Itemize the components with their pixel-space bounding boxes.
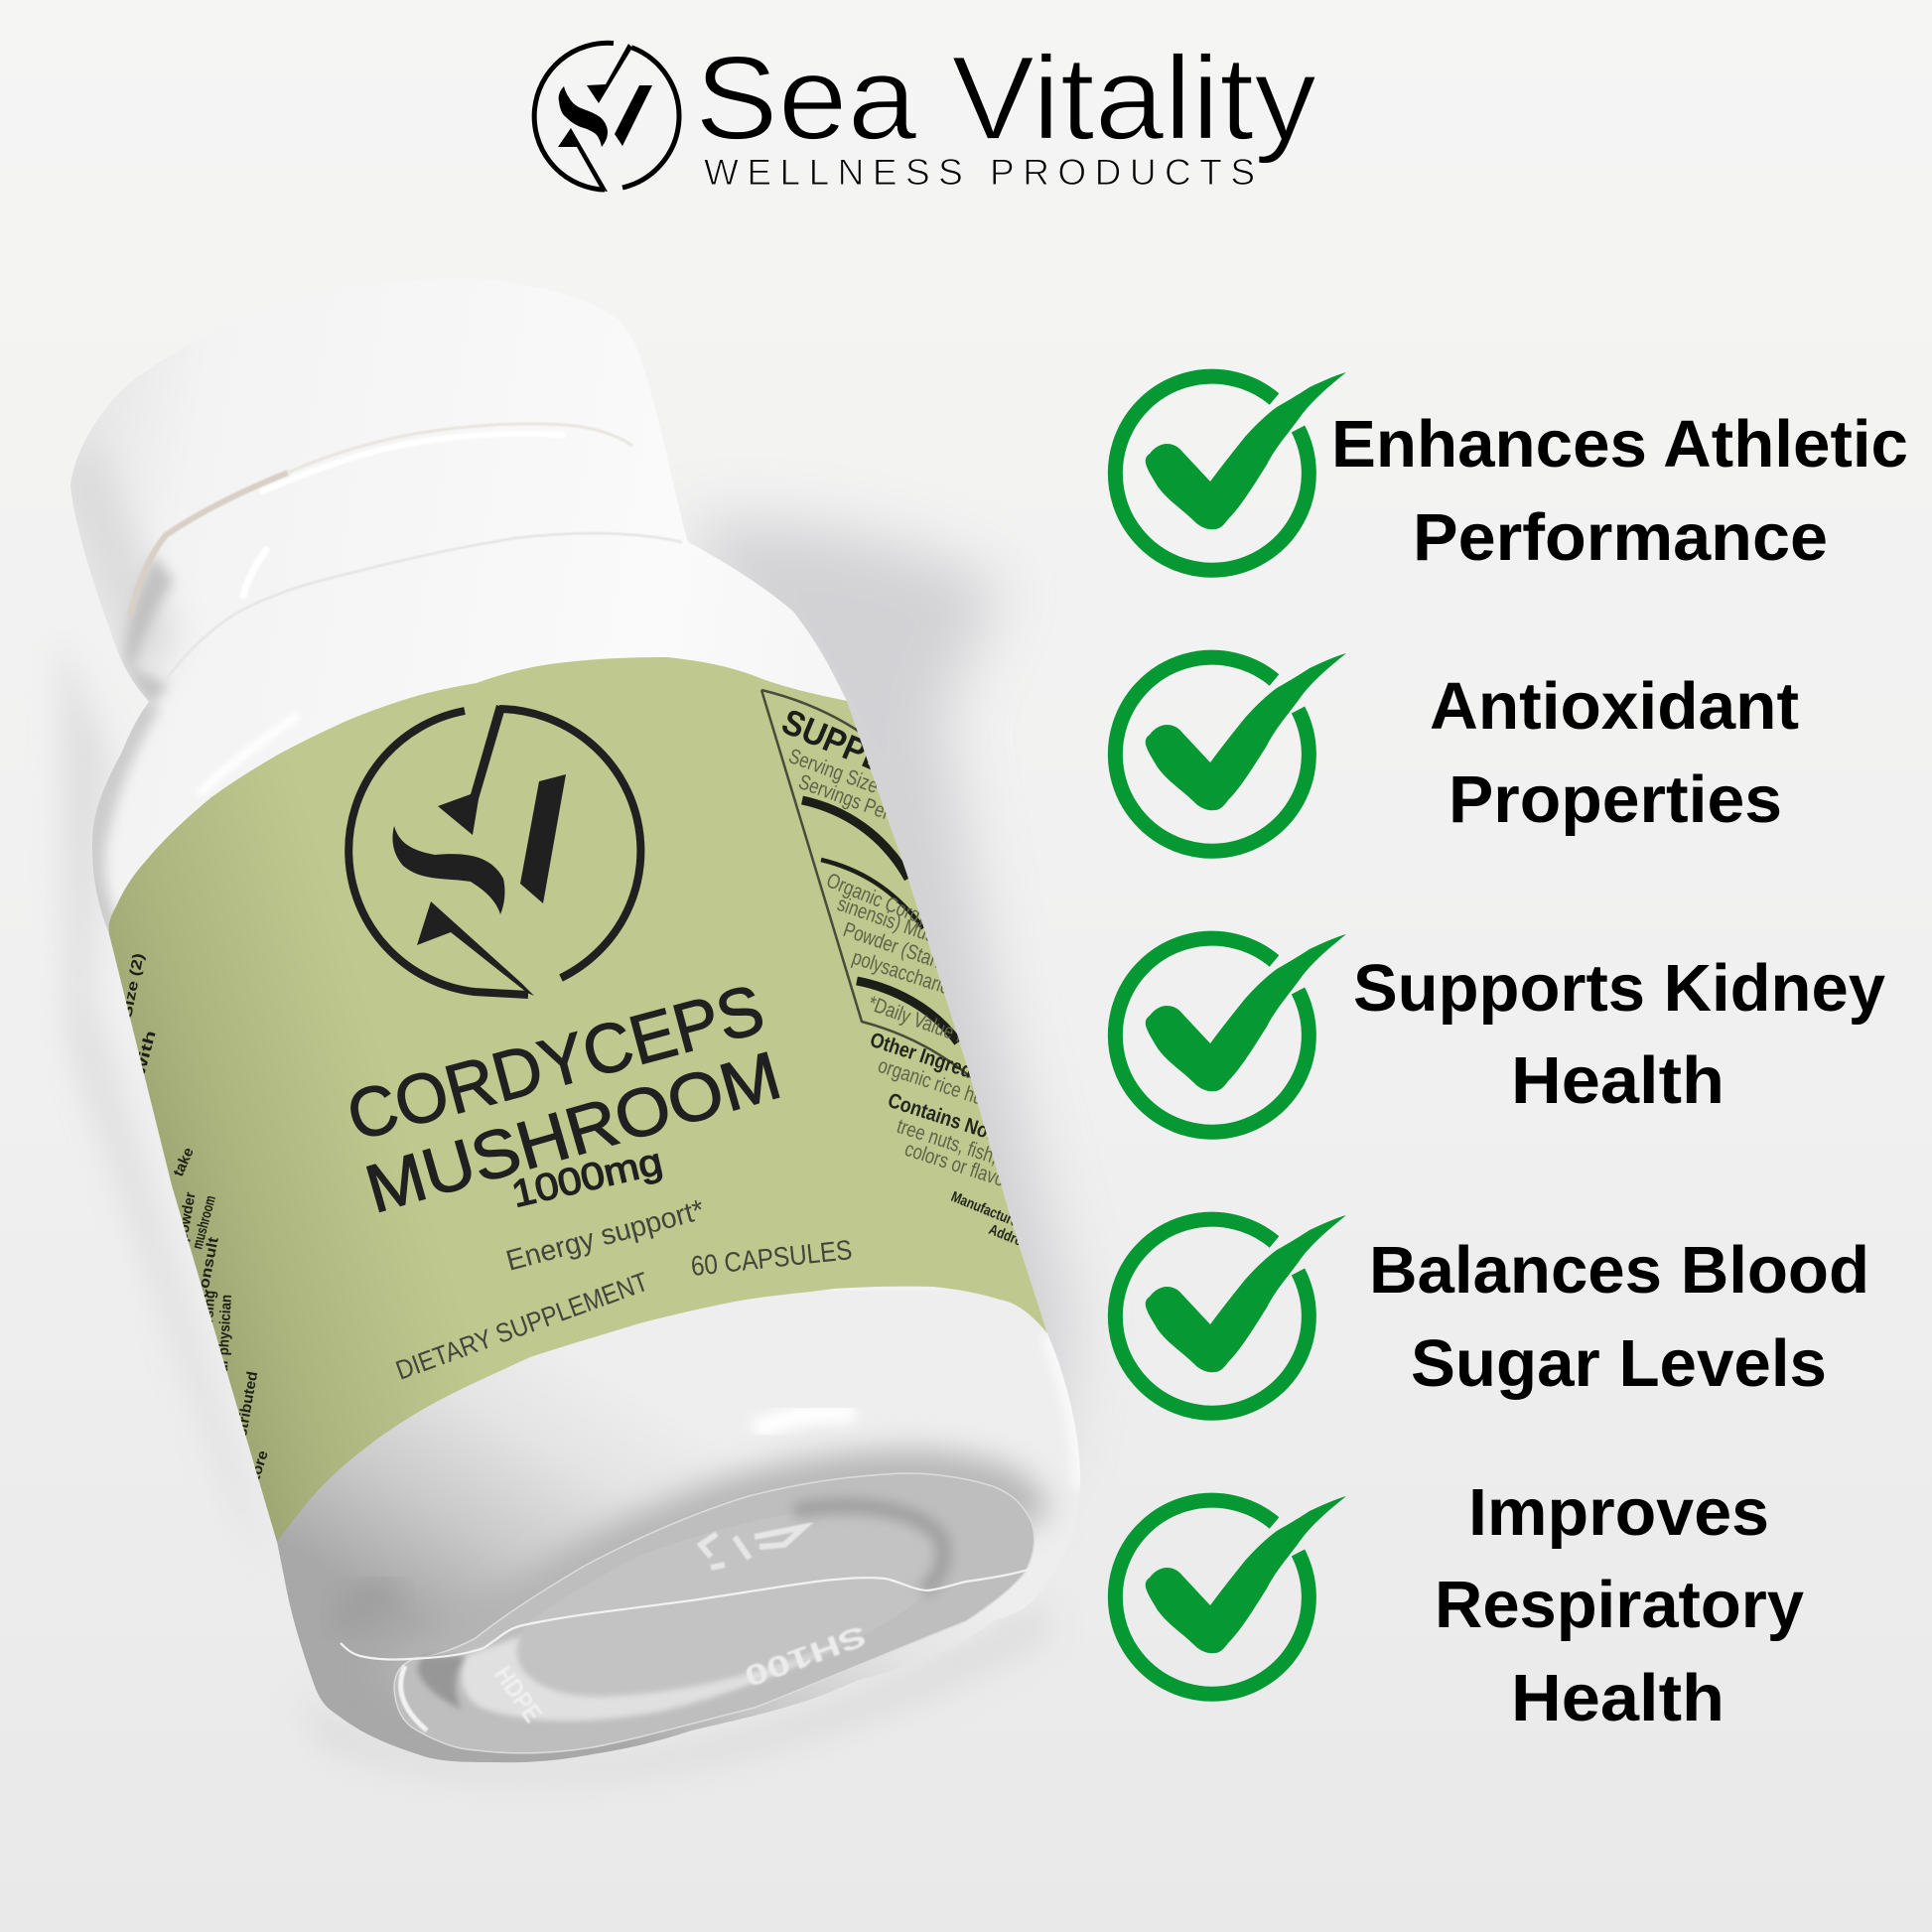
benefit text: [1435, 1475, 1804, 1735]
product name line 2: MUSHROOM: [357, 1037, 788, 1227]
benefit: blood sugar: [1115, 1215, 1869, 1413]
brand name: Sea Vitality: [695, 32, 1316, 165]
wrapped left side text: powder: [174, 1190, 200, 1243]
wrapped left side text: Size (2): [118, 952, 148, 1020]
benefit text: Properties: [1449, 762, 1782, 837]
supplement facts panel: colors or flavors: [901, 1138, 1021, 1196]
benefit: athletic performance: [1115, 372, 1908, 575]
benefit text: Respiratory: [1435, 1568, 1804, 1642]
wrapped left side text: Distributed: [230, 1370, 261, 1453]
supplement facts panel: Contains No:: [885, 1089, 997, 1145]
supplement facts panel: sinensis) Mushroom: [834, 893, 983, 963]
benefit text: [1331, 407, 1908, 575]
base bright lip: [462, 1636, 844, 1721]
icon: green check: [1115, 934, 1346, 1132]
bottle silhouette with cap: [70, 278, 1080, 1762]
supplement facts panel: Serving Size 2 Capsules: [785, 745, 964, 829]
benefit text: Improves: [1468, 1475, 1769, 1550]
benefit: antioxidant: [1115, 653, 1799, 851]
bottle shadow: [60, 522, 1072, 1783]
capsule count: 60 CAPSULES: [689, 1234, 854, 1282]
supplement facts panel: *Daily Value not: [865, 992, 984, 1054]
embossed recycling mark: [701, 1527, 804, 1568]
benefit text: [1353, 951, 1885, 1118]
wrapped left side text: consult: [194, 1236, 222, 1300]
icon: green check: [1115, 1215, 1346, 1413]
base dark wedge: [417, 1656, 465, 1710]
benefit text: Sugar Levels: [1411, 1326, 1827, 1401]
brand tagline: WELLNESS PRODUCTS: [704, 152, 1255, 193]
supplement facts panel: Address: [987, 1221, 1036, 1254]
embossed code: SH100: [740, 1618, 871, 1692]
benefit: kidney health: [1115, 934, 1885, 1132]
base upper crescent: [794, 1506, 943, 1591]
label logo mark: [348, 705, 640, 996]
icon: logo mark: [534, 43, 679, 192]
wrapped left side text: mushroom: [189, 1194, 219, 1251]
wrapped left side text: store: [244, 1449, 272, 1490]
energy claim: Energy support*: [503, 1194, 708, 1278]
label background: [108, 657, 1047, 1542]
benefit text: Performance: [1413, 500, 1828, 575]
supplement facts panel: [760, 689, 1019, 1245]
supplement facts panel: tree nuts, fish, shellfish: [894, 1115, 1062, 1189]
supplement facts panel: Manufactured: [949, 1188, 1028, 1233]
benefit text: Supports Kidney: [1353, 951, 1885, 1026]
wrapped left side text: take: [170, 1145, 198, 1179]
supplement facts panel: organic rice hulls: [875, 1054, 1001, 1115]
benefit text: Health: [1511, 1043, 1725, 1118]
dietary supplement line: DIETARY SUPPLEMENT: [392, 1267, 652, 1386]
shrink seam line: [341, 1569, 1032, 1660]
dosage: 1000mg: [508, 1141, 666, 1216]
lower body shading: [258, 1308, 955, 1763]
embossed material mark: HDPE: [488, 1660, 548, 1727]
benefit text: Health: [1511, 1661, 1725, 1735]
product bottle: [70, 381, 1080, 1763]
supplement facts panel: Powder (Standard): [840, 918, 980, 986]
benefit: respiratory health: [1115, 1475, 1804, 1735]
product name line 1: CORDYCEPS: [340, 970, 771, 1155]
base rim highlight: [401, 1666, 427, 1730]
supplement facts panel: Organic Cordyceps: [823, 870, 964, 944]
supplement facts panel: Servings Per Container: [795, 770, 966, 852]
wrapped left side text: your physician: [213, 1294, 235, 1388]
benefit text: [1430, 669, 1799, 837]
benefit text: Balances Blood: [1369, 1233, 1869, 1308]
benefit text: [1369, 1233, 1869, 1401]
bottle shading and neck detail: [60, 424, 1112, 1787]
wrapped left side text: with: [131, 1029, 160, 1079]
base inner recess: [508, 1509, 945, 1713]
brand logo: [534, 32, 1316, 193]
supplement facts panel: SUPPLEMENT FACTS: [776, 702, 1099, 869]
bottle base: [341, 1473, 1035, 1753]
benefit text: Enhances Athletic: [1331, 407, 1908, 482]
supplement facts panel: polysaccharides: [849, 946, 970, 1005]
product label: [108, 657, 1099, 1542]
benefit text: Antioxidant: [1430, 669, 1799, 744]
wrapped left side text: nursing: [199, 1290, 218, 1339]
supplement facts panel: Other Ingredients:: [867, 1029, 1021, 1098]
icon: green check: [1115, 653, 1346, 851]
wrapped left side text: [126, 954, 268, 1479]
icon: green check: [1115, 1496, 1346, 1694]
icon: green check: [1115, 372, 1346, 570]
